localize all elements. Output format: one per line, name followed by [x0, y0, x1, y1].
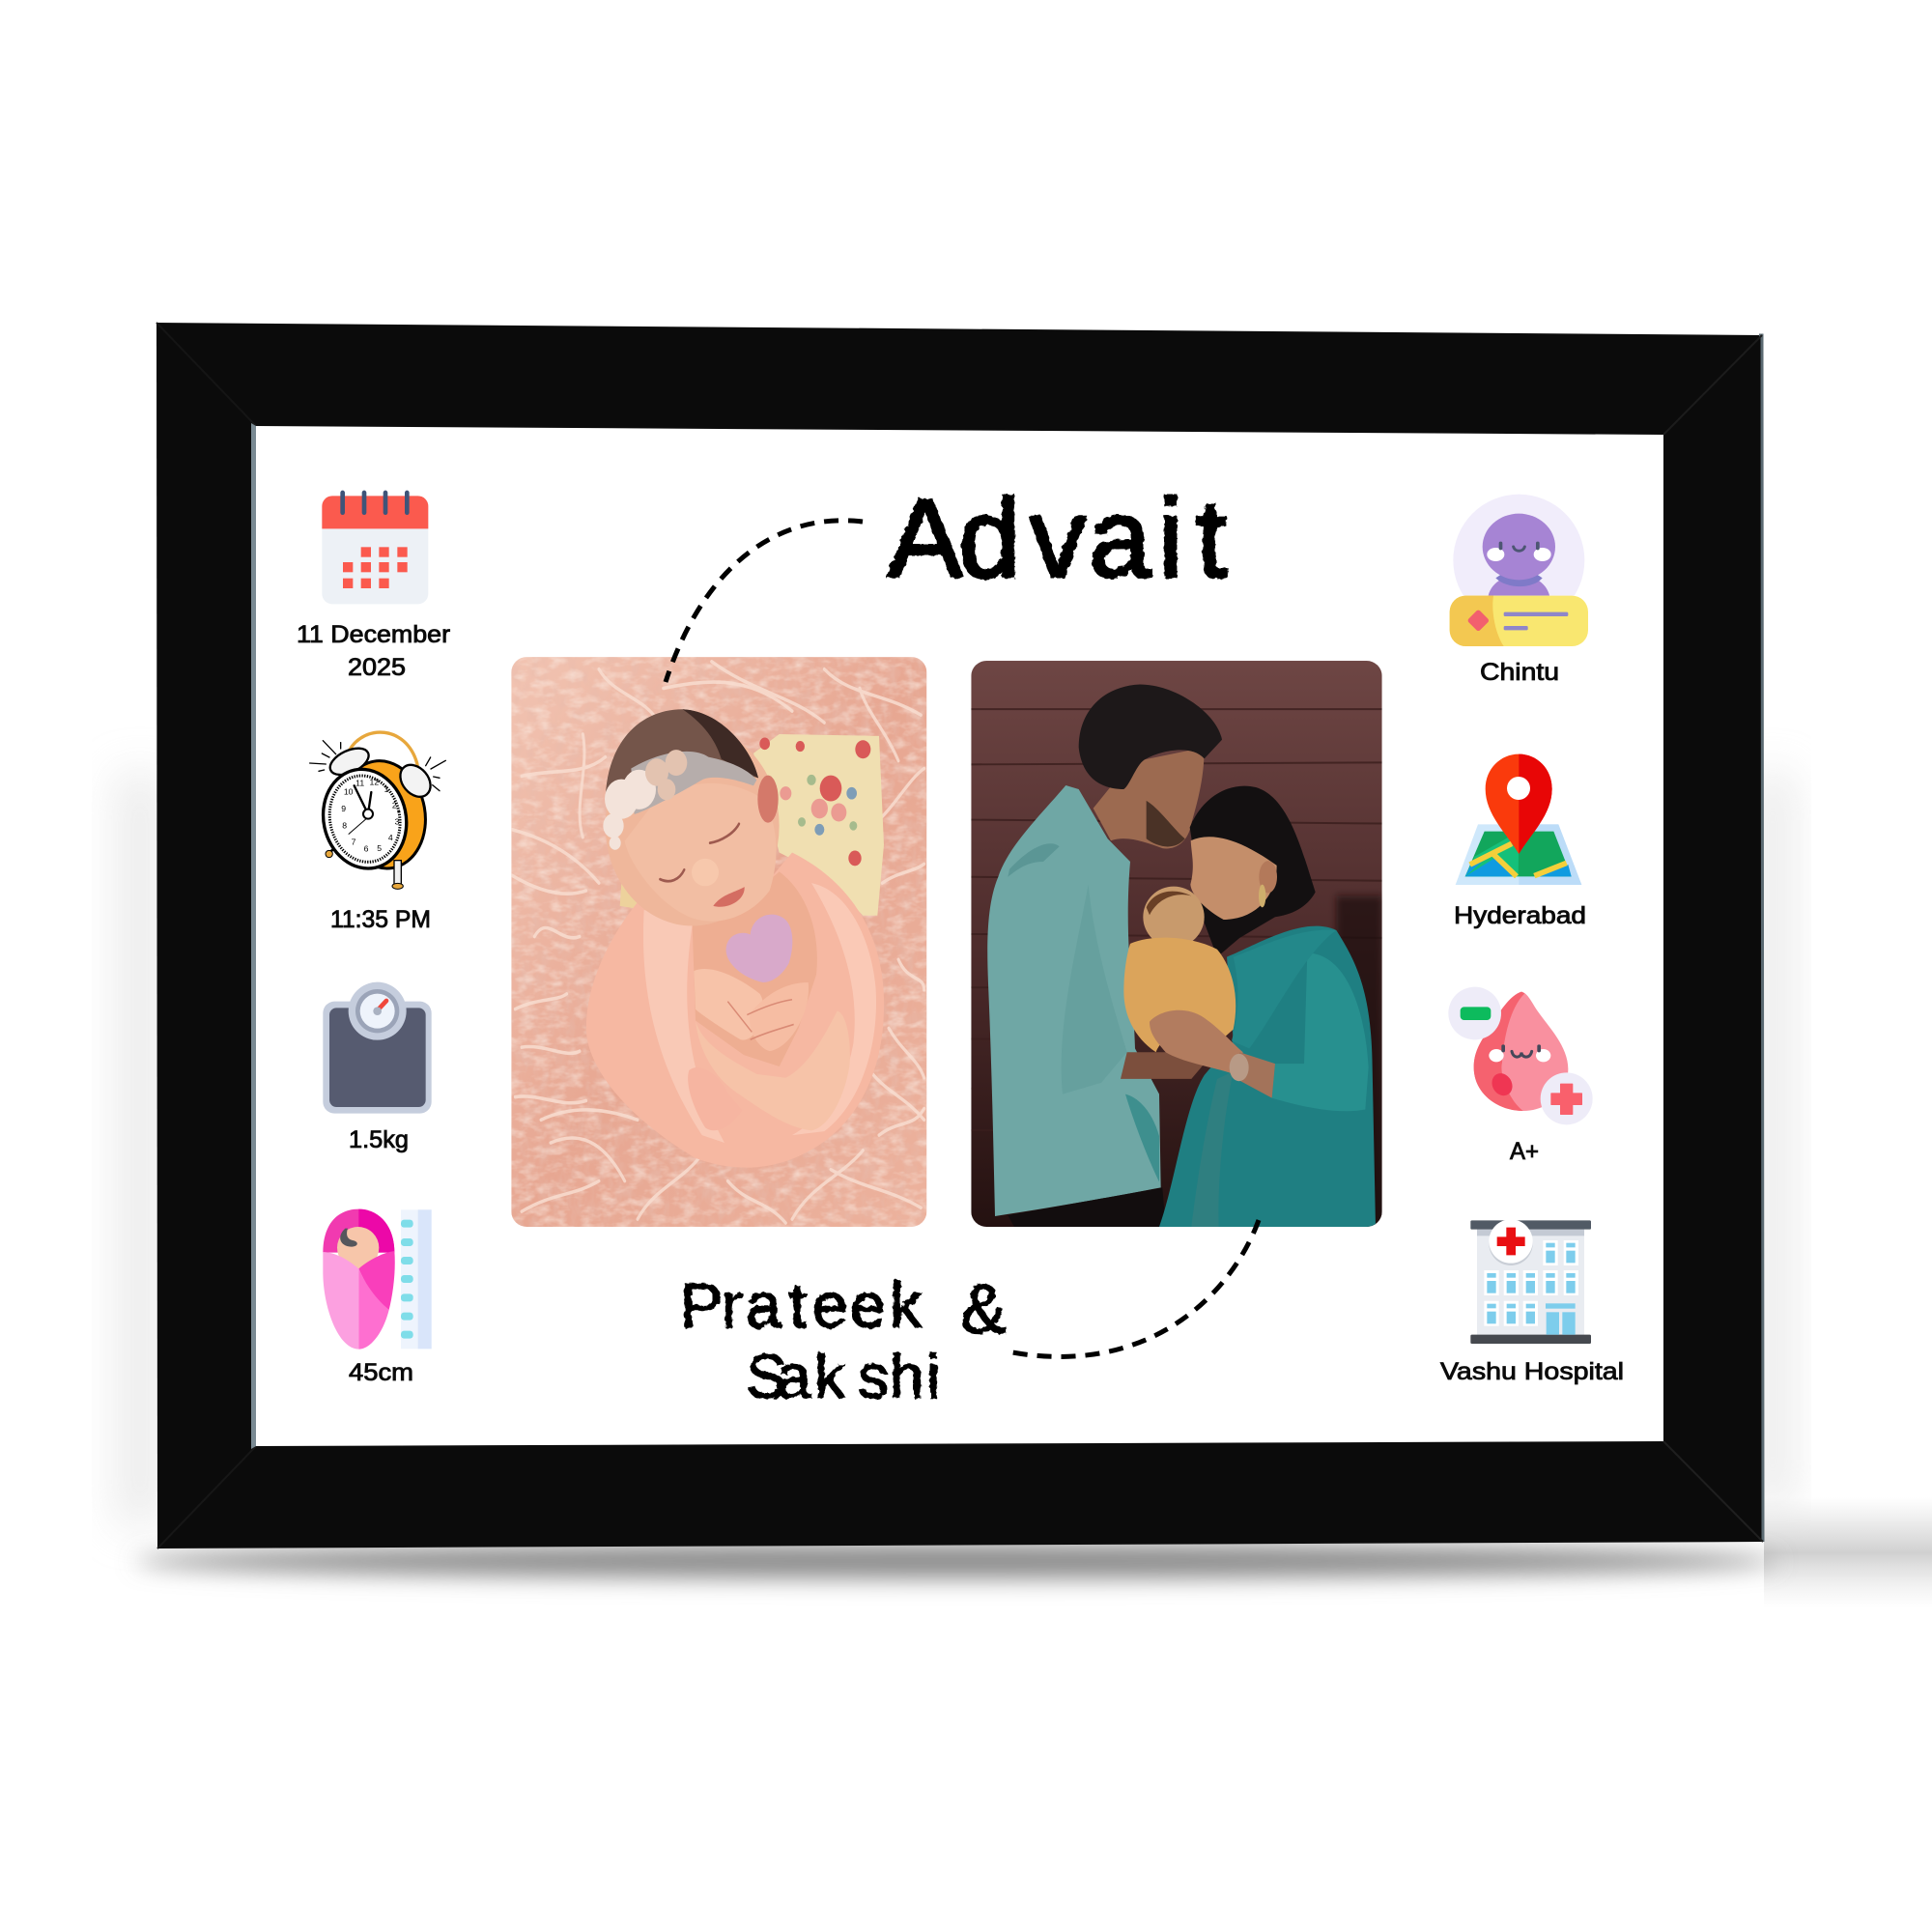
label: date: 11 December	[297, 621, 450, 648]
icon: blood drop with plus and minus	[1448, 987, 1593, 1124]
info: pet name	[1450, 495, 1588, 686]
icon: purple character with name tag	[1450, 495, 1588, 646]
icon: alarm clock: 12	[370, 778, 379, 787]
info: length	[323, 1209, 432, 1386]
icon: swaddled baby with ruler	[323, 1209, 432, 1350]
info: weight	[323, 982, 432, 1153]
icon: calendar	[322, 493, 428, 604]
felt heart	[726, 915, 792, 982]
icon: map pin on map	[1456, 754, 1581, 885]
arms and hands	[1121, 1052, 1205, 1079]
swaddle blanket	[586, 853, 884, 1168]
photo: parents holding newborn	[971, 661, 1382, 1227]
title: baby name: Advait	[888, 475, 1227, 601]
connector: dashed curve from parents photo to names	[1012, 1220, 1259, 1356]
icon: alarm clock: 6	[364, 843, 369, 853]
label: hospital: Vashu Hospital	[1440, 1358, 1624, 1385]
icon: hospital building	[1470, 1219, 1591, 1344]
label: weight: 1.5kg	[349, 1126, 409, 1153]
icon: alarm clock: 2	[392, 801, 397, 810]
label: city: Hyderabad	[1454, 902, 1586, 929]
icon: alarm clock: 4	[388, 833, 393, 842]
panel: black picture frame	[156, 323, 1763, 1548]
info: date of birth: 2025	[348, 654, 406, 681]
icon: alarm clock: 10	[344, 787, 354, 797]
photo: newborn baby on pink fur	[511, 657, 926, 1227]
label: length: 45cm	[349, 1359, 413, 1386]
info: blood group	[1448, 987, 1593, 1165]
panel: white mat	[256, 426, 1663, 1446]
info: hospital	[1440, 1219, 1624, 1385]
info: date of birth	[297, 493, 450, 681]
icon: alarm clock: 1	[384, 784, 389, 794]
icon: alarm clock: 7	[352, 838, 356, 847]
hands	[694, 969, 763, 1040]
headband and flowers	[631, 752, 756, 814]
legs and feet	[696, 1011, 850, 1130]
text: parents names	[680, 1269, 1007, 1411]
text: parents names: &	[960, 1271, 1007, 1349]
label: blood group: A+	[1510, 1138, 1539, 1165]
shadow: frame shadow on wall and floor	[116, 773, 1932, 1608]
text: parents names: Prateek	[680, 1269, 923, 1341]
connector: dashed curve from title to baby photo	[666, 521, 863, 682]
woman: face	[1190, 837, 1277, 920]
woman: dress	[1159, 926, 1376, 1227]
baby wrap	[1123, 938, 1236, 1052]
baby head	[1143, 887, 1205, 948]
icon: alarm clock: 11	[355, 778, 364, 787]
info: time of birth	[310, 732, 445, 933]
skin: chest	[693, 871, 817, 1066]
label: time: 11:35 PM	[330, 906, 431, 933]
head	[606, 725, 780, 925]
icon: alarm clock: 9	[341, 804, 346, 813]
icon: alarm clock: 5	[377, 843, 382, 853]
icon: alarm clock: 8	[342, 821, 347, 831]
icon: alarm clock: 3	[395, 816, 400, 826]
man: trousers	[1008, 1187, 1166, 1227]
man: face and hair	[1094, 748, 1205, 848]
facial features	[660, 824, 739, 881]
woman: hair	[1190, 786, 1316, 957]
label: pet name: Chintu	[1480, 659, 1559, 686]
icon: alarm clock	[310, 732, 445, 889]
info: city	[1454, 754, 1586, 929]
floral pillow	[620, 734, 884, 916]
text: parents names: Sakshi	[746, 1342, 940, 1411]
icon: weighing scale	[323, 982, 432, 1114]
man: shirt	[987, 785, 1161, 1216]
